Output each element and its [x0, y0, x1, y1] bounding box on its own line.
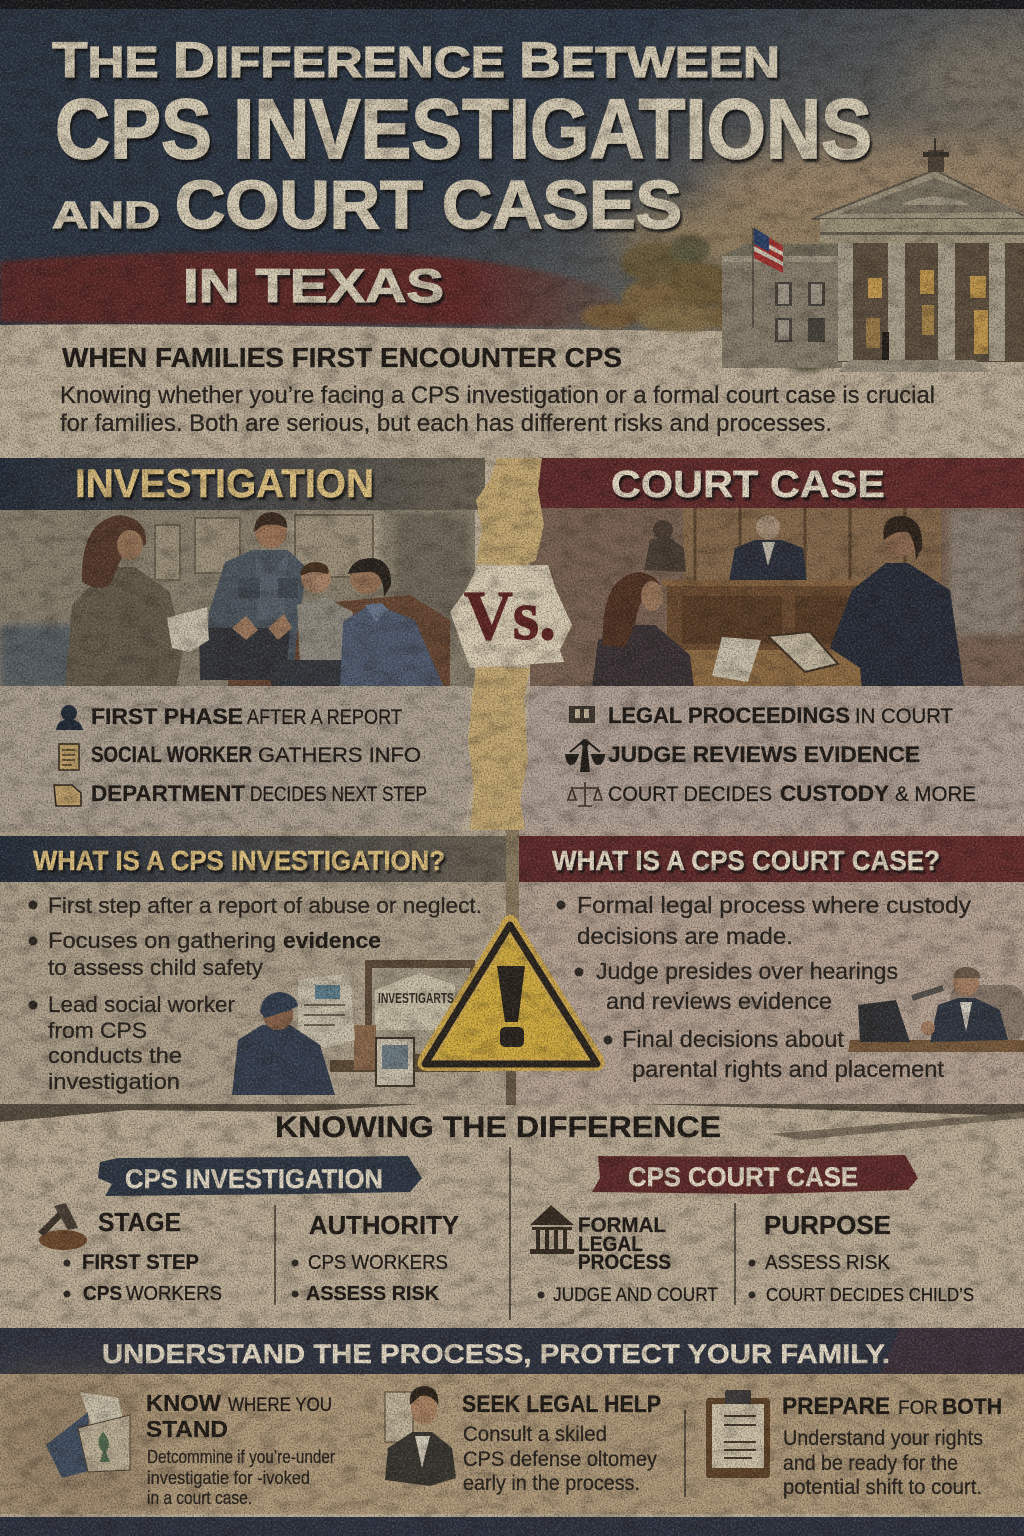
icon: booklet [46, 1392, 130, 1478]
bullet text [577, 892, 972, 1082]
papers [712, 637, 761, 682]
bullet text: Focuses on gathering [48, 928, 276, 953]
banner: understand the process: UNDERSTAND THE PROCESS, PROTECT YOUR FAMILY. [102, 1339, 890, 1369]
bullet text [48, 893, 482, 1094]
bullet text: conducts the [48, 1043, 182, 1068]
tip 1 [146, 1390, 335, 1508]
illustration: judge at desk [848, 967, 1024, 1052]
desk [680, 650, 863, 688]
tip 1: STAND [146, 1416, 228, 1442]
bullet text: parental rights and placement [632, 1056, 945, 1082]
row 3: DEPARTMENT [91, 781, 246, 806]
tip 1: in a court case. [147, 1488, 252, 1508]
column: authority: CPS WORKERS [308, 1252, 448, 1274]
column: purpose: ASSESS RISK [765, 1252, 891, 1274]
bullet text: Judge presides over hearings [596, 958, 898, 984]
header band [0, 458, 485, 510]
title: THE DIFFERENCE BETWEEN [52, 32, 780, 88]
title: IN TEXAS [183, 259, 444, 312]
bullet text: Lead social worker [48, 992, 235, 1017]
column: formal legal process: LEGAL [578, 1233, 643, 1256]
column: formal legal process: JUDGE AND COURT [553, 1285, 718, 1306]
header band [519, 836, 1024, 882]
bullets [556, 900, 612, 1044]
row 1 [91, 704, 402, 729]
header band [0, 836, 506, 882]
title: COURT CASES [175, 167, 682, 243]
column: stage [64, 1207, 222, 1305]
icon: courthouse [530, 1205, 574, 1254]
torn paper divider [468, 458, 544, 830]
tip 3: FOR [898, 1398, 938, 1419]
bullet text: First step after a report of abuse or neglect. [48, 893, 482, 918]
icon: lawyer portrait [385, 1386, 456, 1486]
tip 2: CPS defense oltomey [463, 1448, 657, 1471]
tip 1: WHERE YOU [228, 1395, 332, 1416]
tip 2: SEEK LEGAL HELP [462, 1391, 661, 1418]
column: formal legal process [538, 1214, 718, 1306]
row 2: GATHERS INFO [258, 744, 421, 767]
illustration: courthouse [582, 138, 1024, 372]
title: CPS INVESTIGATIONS [55, 82, 872, 176]
icon: folder [54, 785, 81, 806]
panel: knowing the difference [0, 1104, 1024, 1330]
column: purpose: PURPOSE [764, 1210, 891, 1240]
bullets [28, 900, 38, 1010]
column: authority: AUTHORITY [309, 1210, 459, 1240]
row 2: SOCIAL WORKER [91, 742, 252, 767]
brush label: investigation: CPS INVESTIGATION [125, 1164, 383, 1194]
icon: person [56, 705, 83, 730]
bullet text: from CPS [48, 1018, 147, 1043]
bullet text: Final decisions about [622, 1026, 845, 1052]
icon: scales [565, 739, 605, 772]
decorative dividers [275, 1147, 735, 1320]
panel: hero header [0, 0, 1024, 455]
column: formal legal process: FORMAL [578, 1214, 666, 1237]
panel: what is a CPS court case [516, 830, 1024, 1110]
row 1: LEGAL PROCEEDINGS [608, 703, 850, 728]
trees [582, 236, 834, 372]
column: stage: FIRST STEP [82, 1251, 199, 1274]
intro text block: WHEN FAMILIES FIRST ENCOUNTER CPS [62, 342, 622, 373]
column: stage: CPS [83, 1283, 122, 1305]
heading: COURT CASE [611, 464, 885, 506]
row 2 [91, 742, 421, 767]
tip 3: Understand your rights [783, 1427, 983, 1450]
bullet text: to assess child safety [48, 955, 263, 980]
row 3: COURT DECIDES [608, 783, 772, 806]
tip 2: Consult a skiled [463, 1423, 607, 1446]
row 3: DECIDES NEXT STEP [250, 783, 427, 806]
judge [729, 540, 807, 582]
tip 3 [782, 1393, 1002, 1499]
panel: court case [518, 458, 1024, 830]
bullet text: and reviews evidence [606, 988, 832, 1014]
icon: gavel [38, 1203, 87, 1250]
Vs. badge: Vs. [464, 578, 556, 655]
title [52, 32, 872, 312]
tip 3: PREPARE [782, 1393, 890, 1420]
column: authority [292, 1210, 459, 1305]
heading: WHAT IS A CPS INVESTIGATION? [33, 845, 445, 876]
brush label: court: CPS COURT CASE [628, 1162, 858, 1192]
row 1: AFTER A REPORT [247, 706, 402, 729]
scene: courtroom [530, 505, 1024, 688]
illustration: investigator [232, 960, 480, 1095]
row 2: JUDGE REVIEWS EVIDENCE [608, 742, 920, 767]
woman [592, 625, 694, 688]
tip 1: Detcommine if you’re-under [147, 1447, 335, 1467]
intro text block: Knowing whether you’re facing a CPS investigation or a formal court case is crucial [60, 382, 935, 409]
bottom band [0, 1517, 1024, 1536]
tip 3: potential shift to court. [783, 1476, 982, 1499]
title: AND [52, 195, 160, 237]
brush label: investigation [98, 1156, 422, 1196]
row 1: FIRST PHASE [91, 704, 243, 729]
panel: tips [0, 1374, 1024, 1536]
tip 1: KNOW [146, 1390, 221, 1416]
banner: understand the process [0, 1328, 1024, 1374]
row 3: & MORE [895, 783, 976, 806]
tip 2 [462, 1391, 661, 1495]
bullet text: Formal legal process where custody [577, 892, 972, 918]
list panel [0, 686, 478, 830]
woman [65, 567, 183, 688]
row 3: CUSTODY [780, 781, 889, 806]
tip 3: and be ready for the [783, 1452, 958, 1475]
parchment intro ground [0, 324, 1024, 455]
bench [667, 582, 876, 650]
intro text block: for families. Both are serious, but each has different risks and processes. [60, 410, 832, 437]
tip 3: BOTH [942, 1394, 1002, 1419]
column: formal legal process: PROCESS [578, 1251, 671, 1274]
icon: clipboard [706, 1390, 770, 1478]
column: purpose [748, 1210, 974, 1305]
illustration: investigator: INVESTIGARTS [378, 990, 454, 1007]
Vs. badge [450, 565, 572, 668]
column: authority: ASSESS RISK [306, 1283, 440, 1305]
column: stage: STAGE [98, 1207, 181, 1237]
tip 2: early in the process. [463, 1472, 640, 1495]
teen [340, 603, 444, 688]
heading: INVESTIGATION [75, 462, 374, 506]
heading: WHAT IS A CPS COURT CASE? [552, 845, 940, 876]
intro text block [60, 342, 935, 437]
row 1: IN COURT [855, 705, 953, 728]
red banner [0, 252, 620, 327]
panel: investigation [0, 458, 485, 830]
decorative divider [684, 1410, 686, 1497]
list panel [518, 686, 1024, 830]
row 3 [91, 781, 427, 806]
sofa [228, 595, 450, 688]
document [167, 607, 209, 652]
lawyer [830, 563, 964, 688]
icon: book [569, 706, 595, 723]
bullet text: evidence [283, 928, 381, 953]
header band [533, 458, 1024, 508]
heading: KNOWING THE DIFFERENCE [275, 1111, 721, 1144]
flag [752, 228, 754, 328]
icon: balance [568, 782, 602, 806]
bullet text: investigation [48, 1069, 180, 1094]
tip 1: investigatie for -ivoked [147, 1468, 310, 1488]
row 3 [608, 781, 976, 806]
brush label: court [592, 1155, 918, 1194]
column: stage: WORKERS [126, 1283, 222, 1305]
boy [297, 597, 353, 662]
icon: document [59, 744, 79, 770]
center line [506, 830, 519, 920]
man [205, 550, 307, 670]
scene: family interview [0, 508, 475, 688]
icon: warning triangle [418, 915, 604, 1071]
bullet text: decisions are made. [577, 923, 793, 949]
panel: what is a CPS investigation [0, 830, 506, 1110]
column: purpose: COURT DECIDES CHILD’S [766, 1285, 974, 1305]
